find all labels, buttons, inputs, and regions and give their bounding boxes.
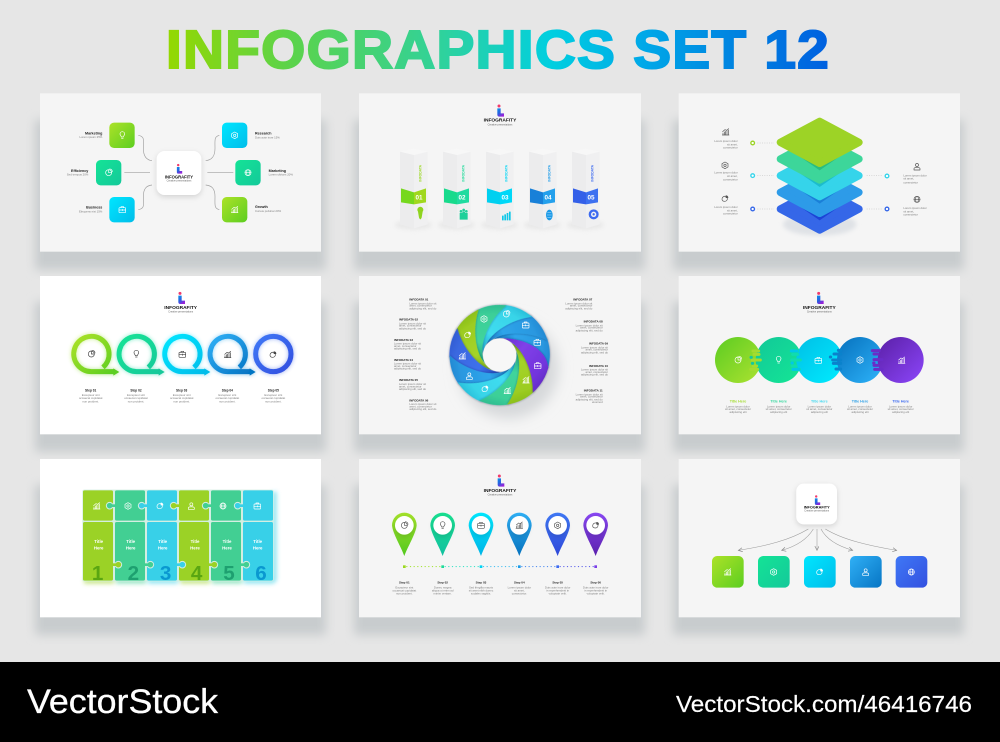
titles: Here [190, 545, 200, 550]
big numbers: 3 [160, 562, 171, 585]
labels: Growth [255, 205, 268, 209]
circle 4 [837, 337, 883, 383]
puzzle icons [93, 503, 261, 509]
left labels: INFODATA 01 [409, 298, 429, 302]
step labels: Step 04 [222, 389, 233, 393]
spiral blades [439, 294, 561, 415]
column 01: 01 [415, 194, 423, 201]
labels: Marketing [269, 169, 286, 173]
titles and text: sit amet, consectetur [725, 407, 751, 411]
left labels: adipiscing elit, sed do [409, 407, 437, 411]
step labels: in reprehenderit in [584, 588, 607, 592]
logo: Creative presentations [168, 310, 194, 313]
right labels: Lorem ipsum dolor sit [565, 301, 593, 305]
right labels: INFODATA 10 [589, 364, 608, 368]
titles and text: Title Here [892, 400, 909, 404]
titles: Title [94, 539, 104, 544]
left labels: Lorem ipsum dolor sit [394, 362, 421, 366]
titles and text: Lorem ipsum dolor [767, 404, 790, 408]
big numbers: 2 [128, 562, 139, 585]
big numbers: 6 [255, 562, 267, 585]
titles and text: Lorem ipsum dolor [848, 404, 872, 408]
layer stack [780, 121, 859, 236]
right labels: Lorem ipsum dolor sit [581, 368, 608, 372]
logo: Creative presentations [488, 123, 513, 126]
logo: INFOGRAFITY [484, 118, 517, 124]
ring 4 [210, 336, 256, 376]
right labels: amet, consectetur [586, 348, 608, 352]
labels: Sed tempus 20% [67, 173, 89, 177]
titles: Title [158, 539, 168, 544]
left callouts: consectetur [723, 146, 738, 150]
pin 1 [392, 513, 417, 556]
dotted timeline [403, 565, 597, 568]
left callouts: Lorem ipsum dolor [714, 171, 738, 175]
logo: Creative presentations [488, 493, 513, 496]
step labels: Excepteur sint [82, 393, 100, 397]
tile: business [109, 197, 135, 222]
circle icons [735, 356, 905, 363]
titles: Here [126, 545, 136, 550]
left labels: INFODATA 04 [394, 358, 413, 362]
tile: marketing right [235, 160, 261, 185]
step labels: Step 03 [176, 389, 188, 393]
step labels: occaecat cupidatat [393, 588, 416, 592]
titles and text: Title Here [730, 400, 746, 404]
tile: marketing [109, 123, 135, 148]
right labels: amet, consectetur [580, 395, 603, 399]
tile: efficiency [96, 160, 121, 185]
step labels: Excepteur sint [127, 393, 145, 397]
ring 2 [119, 336, 165, 376]
titles: Title [191, 539, 200, 544]
step labels: Step 01 [85, 389, 97, 393]
column 01 [395, 149, 432, 230]
left callouts: Lorem ipsum dolor [714, 139, 738, 143]
right callouts: consectetur [903, 180, 918, 184]
step labels: occaecat cupidatat [124, 396, 148, 400]
column 01: INFODATA [418, 164, 422, 182]
logo: Creative presentations [807, 310, 833, 313]
tile: growth [222, 197, 247, 222]
right labels: adipiscing elit, sed do [581, 373, 608, 377]
step labels: sodales sagittis. [471, 592, 491, 596]
labels: Cursus pulvinar 20% [255, 209, 282, 213]
step labels: aliqua ut enim ad [432, 588, 454, 592]
labels: Duis aute irure 15% [255, 135, 280, 139]
right labels: amet, consectetur [580, 326, 603, 330]
tile: research [222, 123, 247, 148]
column 05: 05 [587, 194, 595, 201]
titles and text [725, 400, 914, 414]
step labels: non proident. [396, 592, 413, 596]
step labels: Step 02 [437, 581, 448, 585]
blade icons [459, 310, 541, 394]
step labels: Excepteur sint [395, 585, 414, 589]
left labels: INFODATA 02 [399, 318, 418, 322]
right labels: Lorem ipsum dolor sit [576, 392, 603, 396]
left callouts: consectetur [723, 212, 738, 216]
column 04: 04 [544, 194, 552, 201]
step labels: non proident. [128, 399, 144, 403]
pin 2 [430, 513, 455, 556]
panel: stacked layers [679, 93, 960, 252]
step labels: non proident. [219, 399, 236, 403]
big numbers [92, 562, 267, 585]
step labels: voluptate velit. [549, 592, 567, 596]
column 03: 03 [501, 194, 509, 201]
step labels: occaecat cupidatat [170, 396, 194, 400]
step labels: sit amet, [514, 588, 525, 592]
right labels: INFODATA 07 [573, 298, 593, 302]
step labels: Excepteur sint [173, 393, 191, 397]
column 05 [567, 149, 604, 230]
circle 5 [878, 337, 924, 383]
step labels: Step 05 [552, 581, 563, 585]
titles and text: Lorem ipsum dolor [808, 404, 831, 408]
tile 2 [758, 556, 790, 588]
left labels: INFODATA 03 [394, 338, 413, 342]
circle 1 [715, 337, 761, 383]
column 02 [438, 149, 475, 230]
puzzle tiles [82, 490, 274, 581]
logo [803, 292, 836, 313]
left labels: Lorem ipsum dolor sit [399, 382, 426, 386]
left labels [394, 298, 437, 411]
center card: Creative presentations [167, 179, 192, 182]
left labels: amet, consectetur [409, 404, 432, 408]
tile 5 [896, 556, 927, 588]
titles: Here [94, 545, 104, 550]
left labels: adipiscing elit, sed do [399, 326, 426, 330]
step labels: voluptate velit. [587, 592, 605, 596]
step labels: Step 03 [476, 581, 487, 585]
left labels: amet, consectetur [394, 344, 417, 348]
titles and text: Title Here [770, 400, 787, 404]
titles: Here [222, 545, 232, 550]
step labels: Step 05 [268, 389, 279, 393]
center card: INFOGRAFITY [165, 174, 193, 179]
joining strips [751, 350, 882, 369]
titles and text: sit amet, consectetur [888, 407, 914, 411]
logo [164, 292, 198, 313]
step labels: non proident. [265, 399, 282, 403]
left labels: amet, consectetur [399, 384, 422, 388]
step labels: Excepteur sint [264, 393, 283, 397]
titles and text: sit amet, consectetur [766, 407, 792, 411]
left callouts: consectetur [723, 178, 738, 182]
right labels: INFODATA 11 [584, 389, 603, 393]
panel: puzzle [40, 459, 321, 617]
left labels: adipiscing elit, sed do [394, 367, 421, 371]
title: INFOGRAPHICS SET 12 [166, 20, 830, 80]
titles and text: adipiscing elit [770, 410, 787, 414]
labels: Elequens nisi 15% [79, 209, 103, 213]
left labels: amet, consectetur [409, 304, 432, 308]
big numbers: 1 [92, 562, 103, 585]
tile 4 [850, 556, 882, 588]
panel: columns [359, 93, 641, 252]
tile 3 [804, 556, 836, 588]
footer bar: VectorStock.com/46416746 [676, 691, 972, 717]
logo: INFOGRAFITY [484, 488, 517, 494]
center card [157, 151, 201, 195]
pin 5 [545, 513, 570, 556]
right labels: INFODATA 09 [589, 342, 608, 346]
step labels: non proident. [173, 399, 190, 403]
right callouts: sit amet, [903, 177, 914, 181]
right labels: INFODATA 08 [584, 320, 603, 324]
step labels [393, 581, 608, 596]
left labels: Lorem ipsum dolor sit [394, 342, 421, 346]
tile 1 [712, 556, 744, 588]
right labels: Lorem ipsum dolor sit [576, 323, 603, 327]
right labels [565, 298, 608, 404]
right callouts: Lorem ipsum dolor [903, 206, 927, 210]
titles: Here [253, 545, 263, 550]
right labels: eiusmod [592, 400, 603, 404]
left labels: Lorem ipsum dolor sit [399, 321, 426, 325]
step labels: Step 01 [399, 581, 410, 585]
left labels: Lorem ipsum dolor sit [409, 301, 437, 305]
circle 3 [796, 337, 842, 383]
ring 3 [165, 336, 210, 376]
step labels: Step 02 [130, 389, 142, 393]
step labels: Step 06 [590, 581, 601, 585]
column 04 [524, 149, 561, 230]
pin 3 [469, 513, 493, 556]
column 05: INFODATA [590, 164, 594, 182]
step labels: Lorem ipsum dolor [508, 585, 531, 589]
hub card [796, 484, 837, 524]
panel: arrow rings [40, 276, 321, 434]
step labels: consectetur. [512, 592, 527, 596]
labels: Business [86, 206, 102, 210]
left callouts: sit amet, [727, 174, 738, 178]
left labels: adipiscing elit, sed do [399, 387, 426, 391]
logo [484, 474, 517, 496]
panel: hub and tiles [679, 459, 960, 617]
pin 6 [583, 513, 608, 556]
step labels: non proident. [82, 399, 99, 403]
left labels: amet, consectetur [399, 324, 422, 328]
right labels: adipiscing elit, sed do [576, 328, 603, 332]
left labels: amet, consectetur [394, 364, 417, 368]
right labels: adipiscing elit, sed do [581, 350, 608, 354]
labels: Marketing [85, 131, 102, 135]
step labels [79, 389, 285, 403]
titles [94, 539, 263, 550]
column 03 [481, 149, 518, 230]
big numbers: 5 [223, 562, 235, 585]
labels: Lorem ipsum 25% [80, 135, 103, 139]
titles and text: Title Here [811, 400, 828, 404]
footer bar: VectorStock [27, 683, 219, 721]
step labels: in reprehenderit in [546, 588, 569, 592]
panel: spiral wheel [359, 276, 641, 434]
column 02: INFODATA [461, 164, 465, 182]
right callouts: sit amet, [903, 209, 914, 213]
titles: Title [253, 539, 263, 544]
ring 5 [256, 336, 291, 372]
pin 4 [507, 513, 532, 556]
titles: Here [158, 545, 168, 550]
column 03: INFODATA [504, 164, 508, 182]
step labels: Excepteur sint [218, 393, 237, 397]
logo: INFOGRAFITY [803, 305, 836, 311]
right callouts [885, 163, 927, 217]
logo: INFOGRAFITY [164, 305, 198, 311]
labels [67, 131, 293, 213]
ring 1 [74, 336, 119, 376]
panel: merging circles [679, 276, 960, 434]
step labels: Sed fringilla mauris [469, 585, 494, 589]
column 04: INFODATA [547, 164, 551, 182]
titles and text: adipiscing elit [730, 410, 747, 414]
ring icons [88, 350, 276, 358]
left labels: Lorem ipsum dolor sit [409, 402, 437, 406]
labels: Research [255, 131, 271, 135]
titles and text: Lorem ipsum dolor [726, 404, 750, 408]
step labels: minim veniam. [434, 592, 452, 596]
left labels: INFODATA 06 [409, 398, 429, 402]
step labels: Duis aute irure dolor [545, 585, 570, 589]
step labels: occaecat cupidatat [262, 396, 285, 400]
step labels: occaecat cupidatat [216, 396, 239, 400]
labels: Lorem ultrices 20% [269, 173, 293, 177]
hub card: INFOGRAFITY [804, 506, 830, 510]
step labels: Donec magna [434, 585, 452, 589]
column 02: 02 [458, 194, 466, 201]
titles and text: adipiscing elit [892, 410, 909, 414]
titles and text: adipiscing elit [811, 410, 828, 414]
titles and text: sit amet, consectetur [806, 407, 832, 411]
right labels: adipiscing elit, sed do [576, 397, 603, 401]
titles: Title [126, 539, 136, 544]
titles and text: Title Here [852, 400, 868, 404]
circle 2 [756, 337, 802, 383]
right labels: amet, consectetur [570, 304, 592, 308]
right labels: Lorem ipsum dolor sit [581, 345, 608, 349]
footer bar [0, 662, 1000, 742]
left callouts [714, 129, 882, 216]
step labels: sit amet nibh donec [469, 588, 494, 592]
arrows [738, 529, 897, 550]
logo [484, 104, 517, 126]
left callouts: sit amet, [727, 142, 738, 146]
right labels: amet, consectetur [586, 370, 608, 374]
right callouts: consectetur [903, 213, 918, 217]
step labels: Step 04 [514, 581, 525, 585]
left labels: adipiscing elit, sed do [394, 347, 421, 351]
right labels: adipiscing elit, sed do [565, 306, 593, 310]
step labels: occaecat cupidatat [79, 396, 103, 400]
right callouts: Lorem ipsum dolor [903, 173, 927, 177]
titles and text: sit amet, consectetur [847, 407, 873, 411]
left callouts: sit amet, [727, 208, 738, 212]
labels: Efficiency [71, 169, 89, 173]
titles and text: Lorem ipsum dolor [889, 404, 912, 408]
panel: mind map [40, 93, 321, 252]
left callouts: Lorem ipsum dolor [714, 205, 738, 209]
panel: map pins [359, 459, 641, 617]
hub card: Creative presentations [804, 510, 830, 513]
step labels: Duis aute irure dolor [583, 585, 608, 589]
titles: Title [223, 539, 232, 544]
left labels: adipiscing elit, sed do [409, 306, 437, 310]
left labels: INFODATA 05 [399, 378, 418, 382]
titles and text: adipiscing elit [852, 410, 869, 414]
big numbers: 4 [191, 562, 203, 585]
